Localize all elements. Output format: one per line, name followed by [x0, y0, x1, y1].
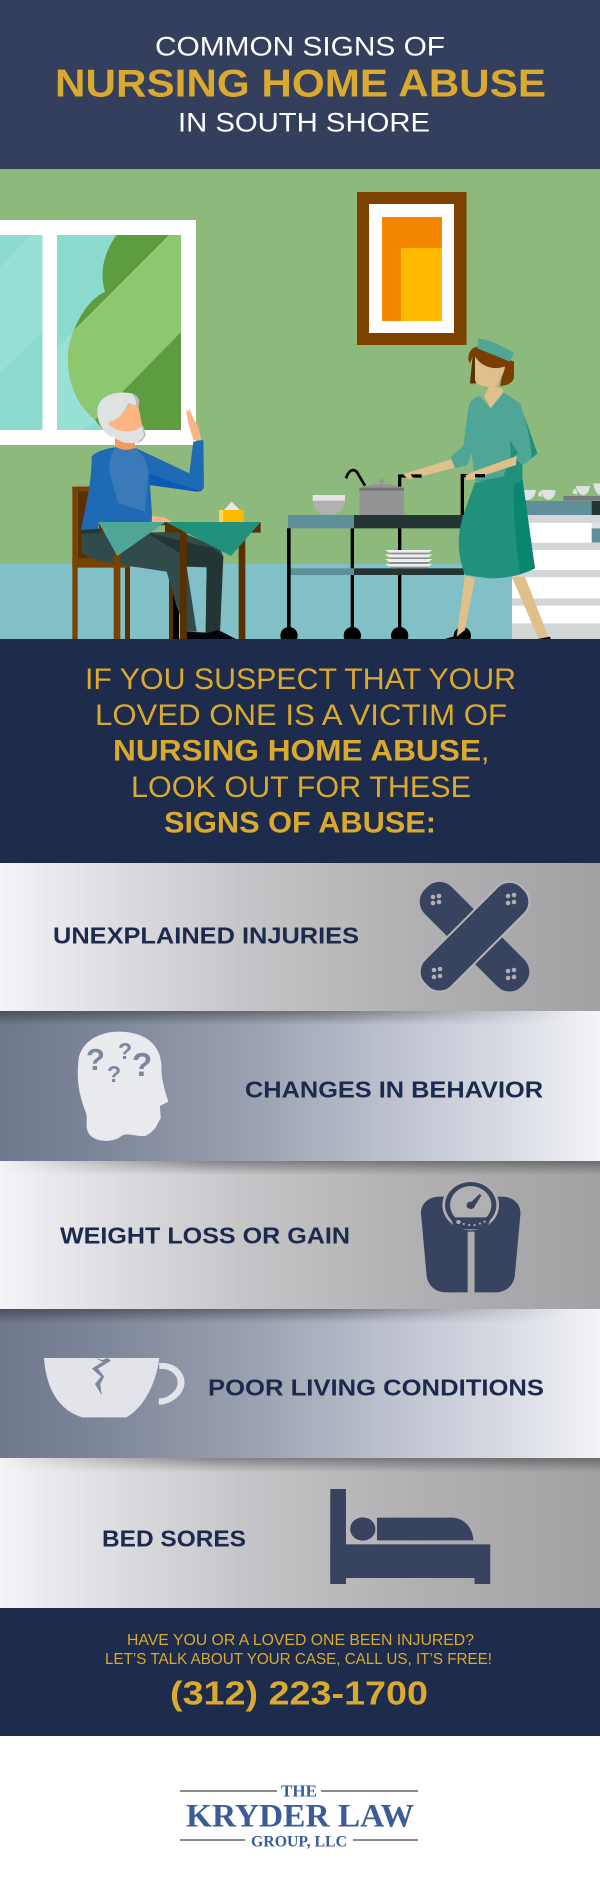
counter with cups [512, 483, 600, 639]
icon: head with question marks: ? [107, 1061, 121, 1087]
label: BED SORES [102, 1526, 246, 1552]
call to action panel [0, 1608, 600, 1736]
row: bed sores [0, 1458, 600, 1608]
row: poor living conditions [0, 1309, 600, 1458]
logo: the kryder law group [180, 1782, 418, 1851]
nurse pushing cart [400, 338, 551, 639]
icon: bathroom scale [421, 1180, 520, 1292]
framed picture [357, 192, 466, 345]
illustration: nursing home dining room [0, 169, 600, 644]
icon: person in bed [330, 1489, 490, 1584]
label: CHANGES IN BEHAVIOR [245, 1077, 543, 1103]
logo: the kryder law group: THE [281, 1782, 317, 1801]
tissue box [219, 502, 244, 522]
hand on table [152, 516, 173, 522]
label: POOR LIVING CONDITIONS [208, 1374, 544, 1400]
arms [403, 456, 517, 479]
shoes [187, 630, 236, 639]
cart legs and wheels [280, 528, 471, 644]
icon: crossed bandages [413, 875, 536, 999]
comma: , [481, 735, 489, 768]
legs and shoes [445, 575, 551, 639]
neck [484, 385, 504, 408]
label: WEIGHT LOSS OR GAIN [60, 1222, 350, 1248]
icon: head with question marks [78, 1032, 168, 1141]
face [475, 357, 505, 387]
serving cart [280, 470, 471, 644]
label: UNEXPLAINED INJURIES [53, 922, 359, 948]
icon: cracked cup [44, 1358, 181, 1417]
icon: head with question marks: ? [86, 1042, 105, 1077]
call text: LET’S TALK ABOUT YOUR CASE, CALL US, IT’S FREE! [105, 1651, 492, 1668]
pot with ladle [346, 470, 404, 515]
cart handles [400, 476, 485, 515]
tree outside window [57, 235, 181, 430]
title line: in south shore: IN SOUTH SHORE [178, 108, 430, 138]
intro text line 1: IF YOU SUSPECT THAT YOUR [85, 663, 516, 696]
old man at table [72, 392, 261, 639]
icon: head with question marks: ? [132, 1046, 152, 1083]
cart shelves [288, 515, 464, 575]
tablecloth [98, 522, 261, 556]
intro text line 4: LOOK OUT FOR THESE [131, 771, 471, 804]
stack of plates [385, 550, 433, 568]
chair [72, 487, 179, 639]
trousers [81, 528, 223, 633]
head with grey hair and beard [97, 392, 146, 443]
phone number: (312) 223-1700 [170, 1676, 428, 1713]
row: unexplained injuries [0, 863, 600, 1011]
neck [115, 437, 135, 450]
hair [468, 347, 514, 386]
hands on handles [403, 472, 475, 480]
icon: head with question marks: ? [118, 1038, 132, 1064]
intro panel [0, 639, 600, 863]
intro text line 3: NURSING HOME ABUSE [113, 735, 481, 768]
row: weight loss or gain [0, 1161, 600, 1309]
intro text line 2: LOVED ONE IS A VICTIM OF [95, 699, 507, 732]
logo: the kryder law group: GROUP, LLC [251, 1834, 347, 1851]
header panel [0, 0, 600, 169]
title line: nursing home abuse: NURSING HOME ABUSE [55, 63, 546, 106]
skirt [459, 479, 535, 578]
sweater [81, 440, 204, 530]
chair front leg [114, 553, 120, 639]
question text: HAVE YOU OR A LOVED ONE BEEN INJURED? [127, 1632, 474, 1649]
raised hand [186, 408, 201, 440]
logo: the kryder law group: KRYDER LAW [186, 1799, 414, 1835]
intro text line 5: SIGNS OF ABUSE: [164, 807, 436, 840]
window [0, 220, 196, 445]
nurse cap [477, 338, 514, 362]
bowl [313, 495, 345, 515]
title line: common signs of: COMMON SIGNS OF [155, 32, 445, 62]
table [98, 522, 261, 639]
row: changes in behavior [0, 1011, 600, 1161]
nurse uniform top [451, 392, 537, 483]
